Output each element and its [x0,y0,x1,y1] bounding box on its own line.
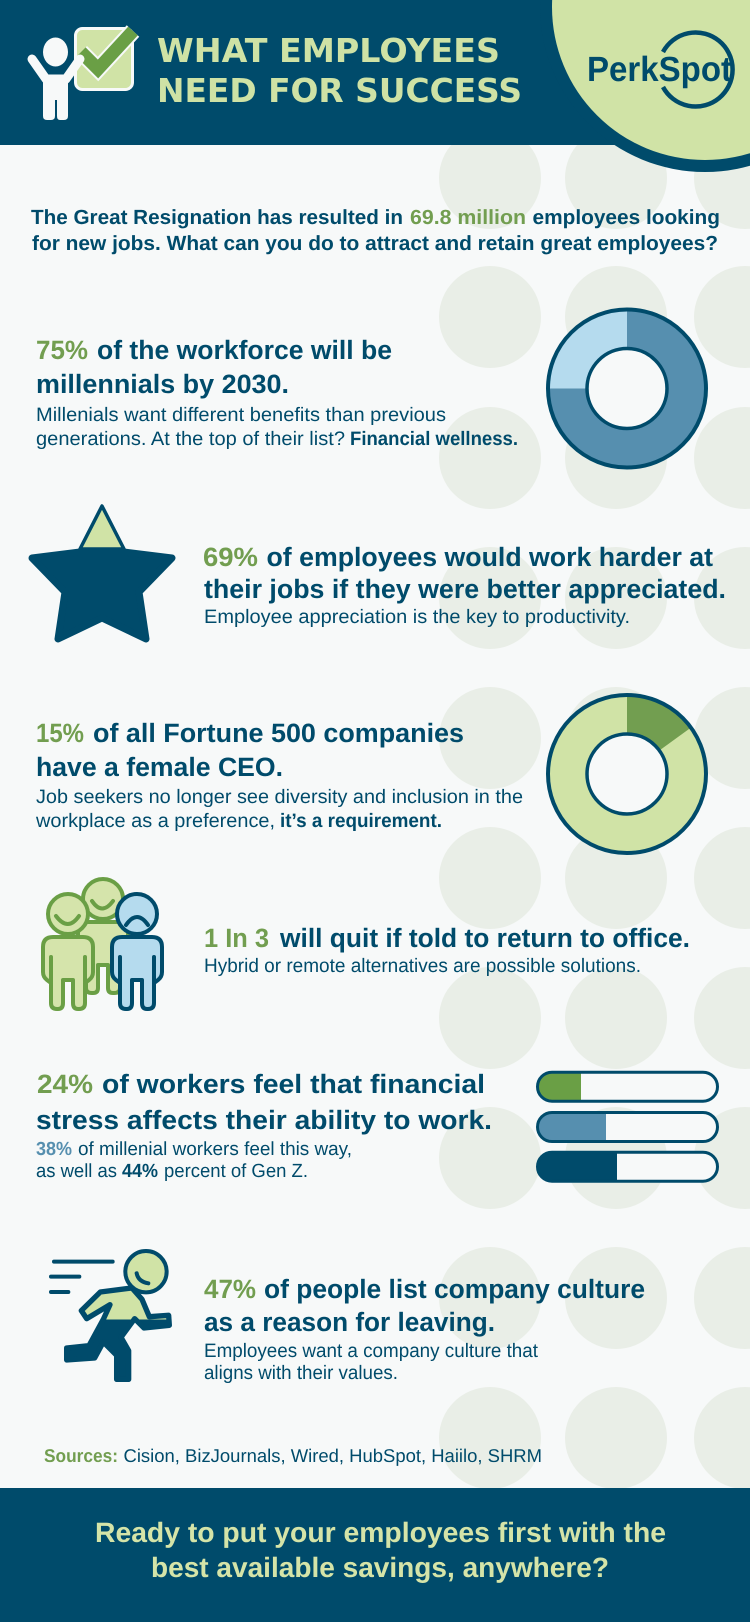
panel: millennials stat: Financial wellness. [350,428,518,450]
panel: financial stress stat: percent of Gen Z. [164,1161,308,1182]
icon: three people [43,879,162,1009]
panel: return to office stat: will quit if told to return to office. [279,923,690,953]
panel: female CEO stat [35,718,523,832]
intro text: The Great Resignation has resulted in [31,206,403,229]
intro text: for new jobs. What can you do to attract and retain great employees? [32,232,718,255]
panel: millennials stat [36,335,518,450]
panel: company culture stat: as a reason for leaving. [204,1307,495,1337]
panel: millennials stat: Millenials want different benefits than previous [36,404,446,426]
panel: return to office stat: 1 In 3 [204,923,269,953]
title: WHAT EMPLOYEES [157,31,500,70]
panel: financial stress stat [36,1069,492,1182]
panel: appreciation stat: of employees would work harder at [266,542,713,572]
title [157,31,522,110]
panel: millennials stat: 75% [36,335,88,365]
panel: female CEO stat: Job seekers no longer see diversity and inclusion in the [36,786,523,808]
footer call to action: best available savings, anywhere? [151,1552,609,1583]
bar: 24 percent [538,1072,718,1101]
panel: millennials stat: generations. At the top of their list? [36,428,345,450]
panel: financial stress stat: of millenial workers feel this way, [78,1139,352,1160]
sources: Cision, BizJournals, Wired, HubSpot, Haiilo, SHRM [124,1445,542,1466]
title: NEED FOR SUCCESS [157,71,522,110]
intro text [31,206,720,255]
panel: appreciation stat [203,542,726,628]
bar: 44 percent [538,1152,718,1181]
icon: running person [51,1251,169,1379]
panel: return to office stat: Hybrid or remote alternatives are possible solutions. [204,955,641,977]
bar: 38 percent [538,1112,718,1142]
intro text: 69.8 million [410,206,526,229]
panel: female CEO stat: of all Fortune 500 companies [93,718,464,748]
icon: person with checkmark board [32,28,133,120]
panel: appreciation stat: 69% [203,542,258,572]
panel: company culture stat: Employees want a company culture that [204,1340,539,1362]
panel: financial stress stat: stress affects their ability to work. [36,1105,492,1135]
panel: company culture stat: aligns with their values. [204,1362,398,1384]
sources: Sources: [44,1445,118,1466]
panel: financial stress stat: 44% [122,1161,158,1182]
panel: return to office stat [204,923,690,977]
footer call to action: Ready to put your employees first with the [95,1517,666,1548]
panel: appreciation stat: their jobs if they were better appreciated. [204,574,726,604]
panel: female CEO stat: have a female CEO. [36,752,283,782]
donut chart: 75 percent [548,310,706,468]
panel: company culture stat: of people list company culture [264,1274,645,1304]
panel: financial stress stat: 38% [36,1139,72,1160]
panel: financial stress stat: as well as [36,1161,117,1182]
panel: female CEO stat: 15% [36,718,84,748]
panel: financial stress stat: 24% [37,1069,93,1099]
panel: company culture stat: 47% [204,1274,256,1304]
panel: female CEO stat: it’s a requirement. [280,810,442,832]
donut chart: 15 percent [548,695,706,853]
intro text: employees looking [532,206,720,229]
logo badge: PerkSpot: PerkSpot [587,50,732,89]
icon: star [32,506,172,639]
panel: female CEO stat: workplace as a preference, [35,810,275,832]
panel: millennials stat: millennials by 2030. [36,369,289,399]
panel: millennials stat: of the workforce will be [97,335,392,365]
logo badge: PerkSpot [540,0,750,172]
header banner [0,0,750,145]
panel: appreciation stat: Employee appreciation is the key to productivity. [204,606,630,628]
footer call to action [0,1488,750,1622]
panel: financial stress stat: of workers feel that financial [102,1069,485,1099]
panel: company culture stat [204,1274,645,1384]
progress bars [538,1072,718,1181]
